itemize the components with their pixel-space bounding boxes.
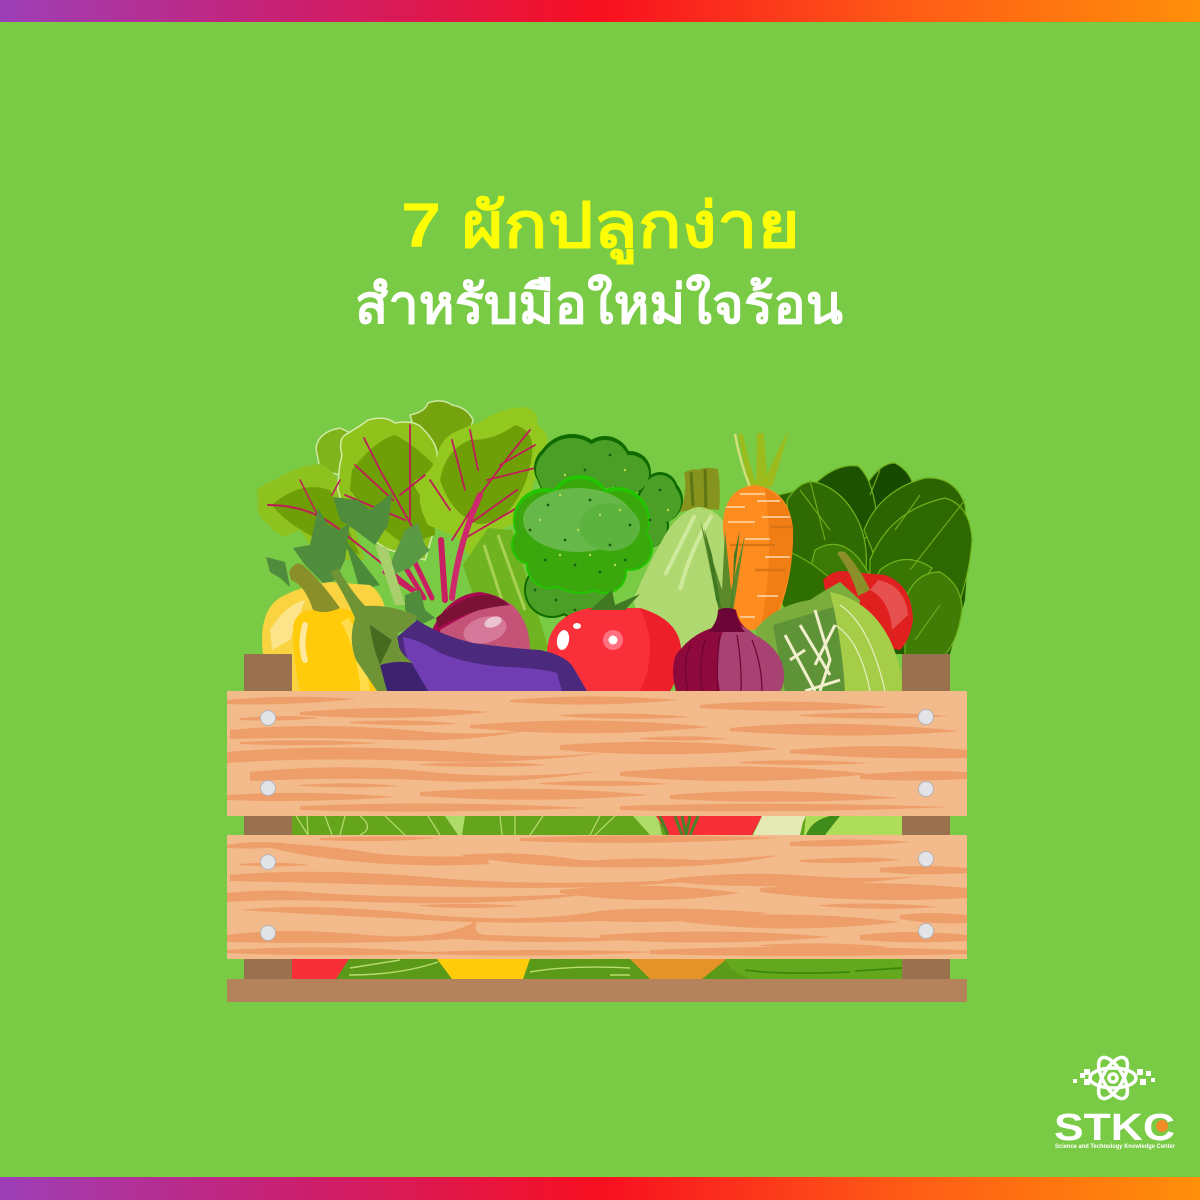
title line 2: สำหรับมือใหม่ใจร้อน [355,273,843,335]
onion base [630,959,727,979]
spinach [778,463,972,655]
centre leaf [338,418,440,560]
carrot greens [738,433,788,487]
wooden crate [227,654,967,1002]
pepper stem [289,563,340,612]
red pepper base [292,959,349,979]
crate base [227,979,967,1002]
nails [260,710,934,940]
back pepper [262,582,387,691]
right middle post [902,816,950,835]
lower plank [227,835,967,959]
upper gap veins [296,816,615,835]
logo orange dot [1156,1120,1168,1132]
right upper post [902,654,950,691]
onion [673,520,784,691]
lower plank grain [227,836,967,956]
right leaf [414,407,548,557]
left upper post [244,654,292,691]
upper plank [227,691,967,816]
carrot body [723,485,793,630]
lower gap veins [349,960,630,975]
title [355,191,843,335]
red tomato strip [656,816,762,835]
leaf veins and stems [268,425,535,600]
logo pixel dots [1073,1069,1155,1085]
pale leaf strip [445,816,662,835]
logo atom icon [1090,1053,1136,1103]
left leaf [257,464,365,560]
carrot [723,433,793,630]
title line 1: 7 ผักปลูกง่าย [401,191,800,265]
broccoli front [511,454,669,611]
eggplant cap [330,568,417,691]
logo tagline: Science and Technology Knowledge Center [1055,1144,1176,1150]
herb leaves [266,493,435,625]
top gradient bar [0,0,1200,22]
cabbage [755,582,903,691]
beet leaves [257,401,548,600]
upper plank grain [227,696,967,812]
yellow pepper base [437,959,530,979]
right lower post [902,959,950,979]
broccoli back [524,434,683,620]
celery stalk [463,528,549,655]
yellow peppers [262,563,387,691]
upper gap contents [292,816,902,835]
cucumber base [725,959,902,979]
crate contents visible through gaps [292,816,902,979]
eggplant [330,568,587,691]
red pepper [823,551,913,650]
lower gap contents [292,959,902,979]
cabbage strip [753,816,806,835]
tomato [547,590,681,691]
back leaves [315,427,350,476]
left middle post [244,816,292,835]
beetroot [432,592,530,650]
left lower post [244,959,292,979]
zucchini [634,468,724,648]
logo wordmark: STKC [1054,1107,1175,1149]
STKC logo [1054,1053,1176,1150]
bottom gradient bar [0,1177,1200,1200]
front pepper [293,608,375,691]
vegetables above the crate [257,401,972,691]
